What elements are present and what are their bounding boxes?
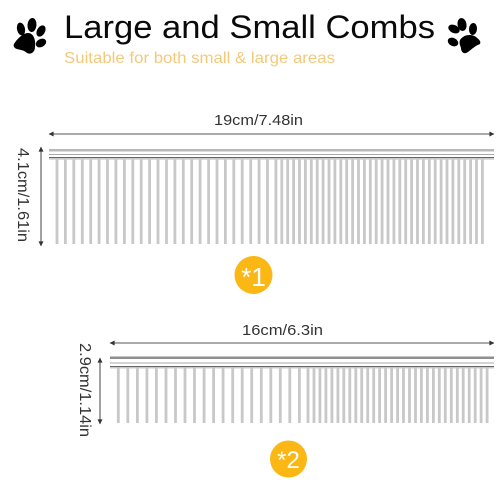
badge: *2: [270, 440, 307, 478]
badge: *1: *1: [241, 262, 266, 292]
icon: left paw print: [14, 18, 48, 54]
dimension: large comb width: 19cm/7.48in: [214, 112, 303, 129]
dimension: small comb width: 16cm/6.3in: [242, 322, 323, 339]
badge: *1: [234, 256, 272, 294]
dimension: small comb height: [76, 343, 100, 437]
dimension: small comb height: 2.9cm/1.14in: [76, 343, 93, 437]
small comb: [110, 356, 494, 423]
large comb: [49, 149, 494, 244]
title: Large and Small Combs: [64, 9, 435, 45]
icon: right paw print: [446, 17, 480, 53]
dimension: large comb height: [14, 147, 41, 246]
subtitle: Suitable for both small & large areas: [64, 50, 335, 67]
dimension: large comb height: 4.1cm/1.61in: [14, 148, 31, 242]
badge: *2: *2: [277, 447, 300, 474]
